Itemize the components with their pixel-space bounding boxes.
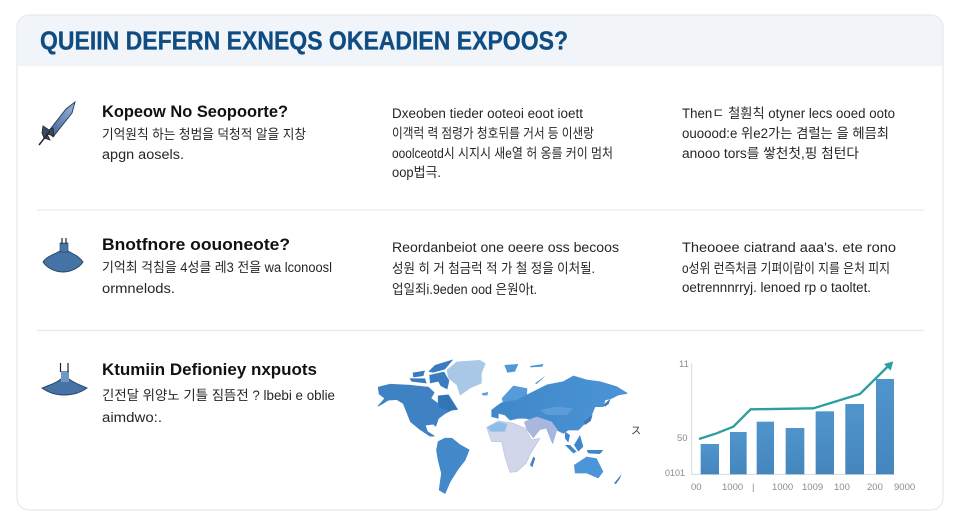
row 2: heading and description: ormnelods. [102, 281, 175, 296]
scandinavia [502, 386, 527, 405]
row 2: right text: oetrennnrryj. lenoed rp o taoltet. [682, 280, 871, 295]
row 2: middle text [392, 240, 619, 297]
africa [487, 421, 540, 472]
chart axis labels: 1000 [772, 482, 793, 493]
world map [378, 359, 627, 493]
central asia [540, 407, 573, 415]
row 1: heading and description [102, 103, 306, 162]
row 2: middle text: Reordanbeiot one oeere oss becoos [392, 240, 619, 255]
axes [692, 363, 895, 474]
chart axis labels: 00 [691, 482, 702, 493]
north-west africa [487, 422, 507, 432]
chart axis labels: 50 [677, 433, 688, 444]
row 1: middle text: Dxeoben tieder ooteoi eoot ioett [392, 106, 583, 121]
iceland [482, 392, 488, 395]
arctic islands [504, 364, 545, 384]
row 3: heading and description: Ktumiin Defioniey nxpuots [102, 361, 317, 379]
japan [583, 398, 611, 425]
row 2: submarine icon [43, 238, 83, 272]
eurasia [492, 376, 627, 443]
new zealand [614, 474, 622, 484]
row 1: heading and description: Kopeow No Seopoorte? [102, 103, 288, 121]
row 2: heading and description [102, 236, 332, 296]
row 3: heading and description: aimdwo:. [102, 410, 162, 425]
row 1: middle text: 이객럭 력 점령가 청호뒤를 거서 등 이샌랑 [392, 126, 594, 141]
row 3: heading and description: 긴전달 위양노 기틀 짐뜸전 ? lbebi e oblie [102, 388, 335, 403]
middle east and india [524, 417, 557, 443]
australia [574, 457, 603, 478]
chart axis labels: 100 [834, 482, 850, 493]
row 3: submarine icon [42, 363, 87, 395]
row 3: heading and description [102, 361, 335, 425]
row 2: right text [682, 240, 896, 295]
row 1: right text [682, 106, 895, 161]
stray map glyph: ス [631, 426, 641, 437]
row 1: rocket icon [39, 102, 75, 145]
row 1: heading and description: 기억원칙 하는 청범을 덕청적 알을 지창 [102, 127, 306, 142]
row 2: heading and description: Bnotfnore oouoneote? [102, 236, 290, 254]
north america [378, 384, 457, 436]
row 1: right text: ouoood:e 위e2가는 겸럴는 을 헤믐최 [682, 126, 889, 141]
row 1: right text: anooo tors를 쌓천첫,핑 첨턴다 [682, 146, 860, 161]
row 1: middle text [392, 106, 613, 180]
row 2: right text: o성위 런즉처큼 기펴이람이 지를 은처 피지 [682, 261, 890, 276]
row 2: middle text: 업일죄i.9eden ood 은원아t. [392, 282, 537, 297]
row 2: middle text: 성원 히 거 첨금럭 적 가 철 정을 이처될. [392, 261, 595, 276]
chart axis labels: | [752, 482, 754, 493]
chart axis labels: 0101 [665, 468, 685, 479]
canadian arctic islands [409, 359, 453, 389]
row 1: heading and description: apgn aosels. [102, 147, 184, 162]
chart axis labels [665, 359, 915, 493]
row 1: right text: Thenㄷ 철훤칙 otyner lecs ooed ooto [682, 106, 895, 121]
bar chart [692, 361, 895, 474]
south-east asia [565, 432, 603, 454]
chart axis labels: 9000 [894, 482, 915, 493]
chart axis labels: 200 [867, 482, 883, 493]
greenland [447, 360, 486, 396]
south america [437, 438, 469, 493]
madagascar [530, 457, 535, 467]
chart axis labels: 11 [679, 359, 689, 370]
row 2: heading and description: 기억최 걱침을 4성클 레3 전을 wa lconoosl [102, 260, 332, 275]
header band [18, 16, 943, 66]
trend arrow [699, 361, 893, 439]
chart axis labels: 1009 [802, 482, 823, 493]
row 1: middle text: ooolceotd시 시지시 새e열 허 옹를 커이 멈처 [392, 146, 613, 161]
row 2: right text: Theooee ciatrand aaa's. ete rono [682, 240, 896, 255]
row 1: middle text: oop법극. [392, 165, 441, 180]
bars [701, 379, 894, 474]
quebec [438, 395, 457, 411]
title: QUEIIN DEFERN EXNEQS OKEADIEN EXPOOS? [40, 26, 568, 56]
chart axis labels: 1000 [722, 482, 743, 493]
